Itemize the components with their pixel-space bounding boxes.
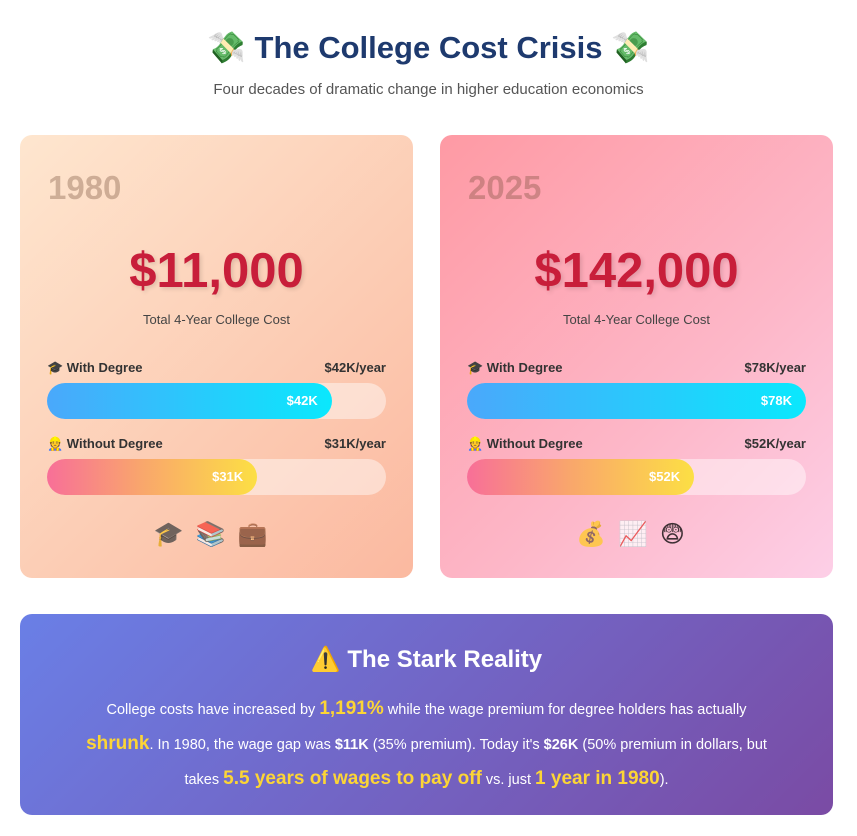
panel: 2025 — [440, 135, 833, 578]
cost label: Total 4-Year College Cost — [563, 312, 710, 327]
body text: shrunk. In 1980, the wage gap was $11K (35% premium). Today it's $26K (50% premium in dollars, but — [86, 733, 767, 754]
with degree label: $78K/year — [745, 360, 806, 375]
with degree bar: $78K — [761, 393, 792, 408]
without degree bar: $31K — [212, 469, 243, 484]
without degree bar — [467, 459, 806, 495]
without degree label — [467, 436, 806, 451]
body text: College costs have increased by 1,191% while the wage premium for degree holders has actually — [107, 698, 746, 719]
without degree label: $52K/year — [745, 436, 806, 451]
panel: 1980 — [20, 135, 413, 578]
without degree bar — [47, 459, 386, 495]
with degree bar: $42K — [287, 393, 318, 408]
with degree bar — [47, 383, 386, 419]
without degree label: 👷 Without Degree — [47, 436, 163, 451]
year label: 2025 — [468, 169, 541, 206]
with degree bar — [467, 383, 806, 419]
title: 💸 The College Cost Crisis 💸 — [207, 30, 650, 65]
cost label: Total 4-Year College Cost — [143, 312, 290, 327]
without degree label: 👷 Without Degree — [467, 436, 583, 451]
without degree label: $31K/year — [325, 436, 386, 451]
with degree label — [467, 360, 806, 375]
heading: ⚠️ The Stark Reality — [311, 646, 542, 673]
icons: 💰📈😨 — [576, 521, 697, 548]
with degree label — [47, 360, 386, 375]
year label: 1980 — [48, 169, 121, 206]
panel: stark reality — [20, 614, 833, 815]
with degree label: $42K/year — [325, 360, 386, 375]
without degree label — [47, 436, 386, 451]
total cost: $11,000 — [129, 244, 304, 298]
subtitle: Four decades of dramatic change in higher education economics — [213, 81, 644, 98]
body text: takes 5.5 years of wages to pay off vs. just 1 year in 1980). — [184, 768, 669, 789]
icons: 🎓📚💼 — [154, 521, 279, 548]
with degree label: 🎓 With Degree — [47, 360, 143, 375]
total cost: $142,000 — [534, 244, 739, 298]
without degree bar: $52K — [649, 469, 680, 484]
with degree label: 🎓 With Degree — [467, 360, 563, 375]
body text — [86, 698, 767, 789]
